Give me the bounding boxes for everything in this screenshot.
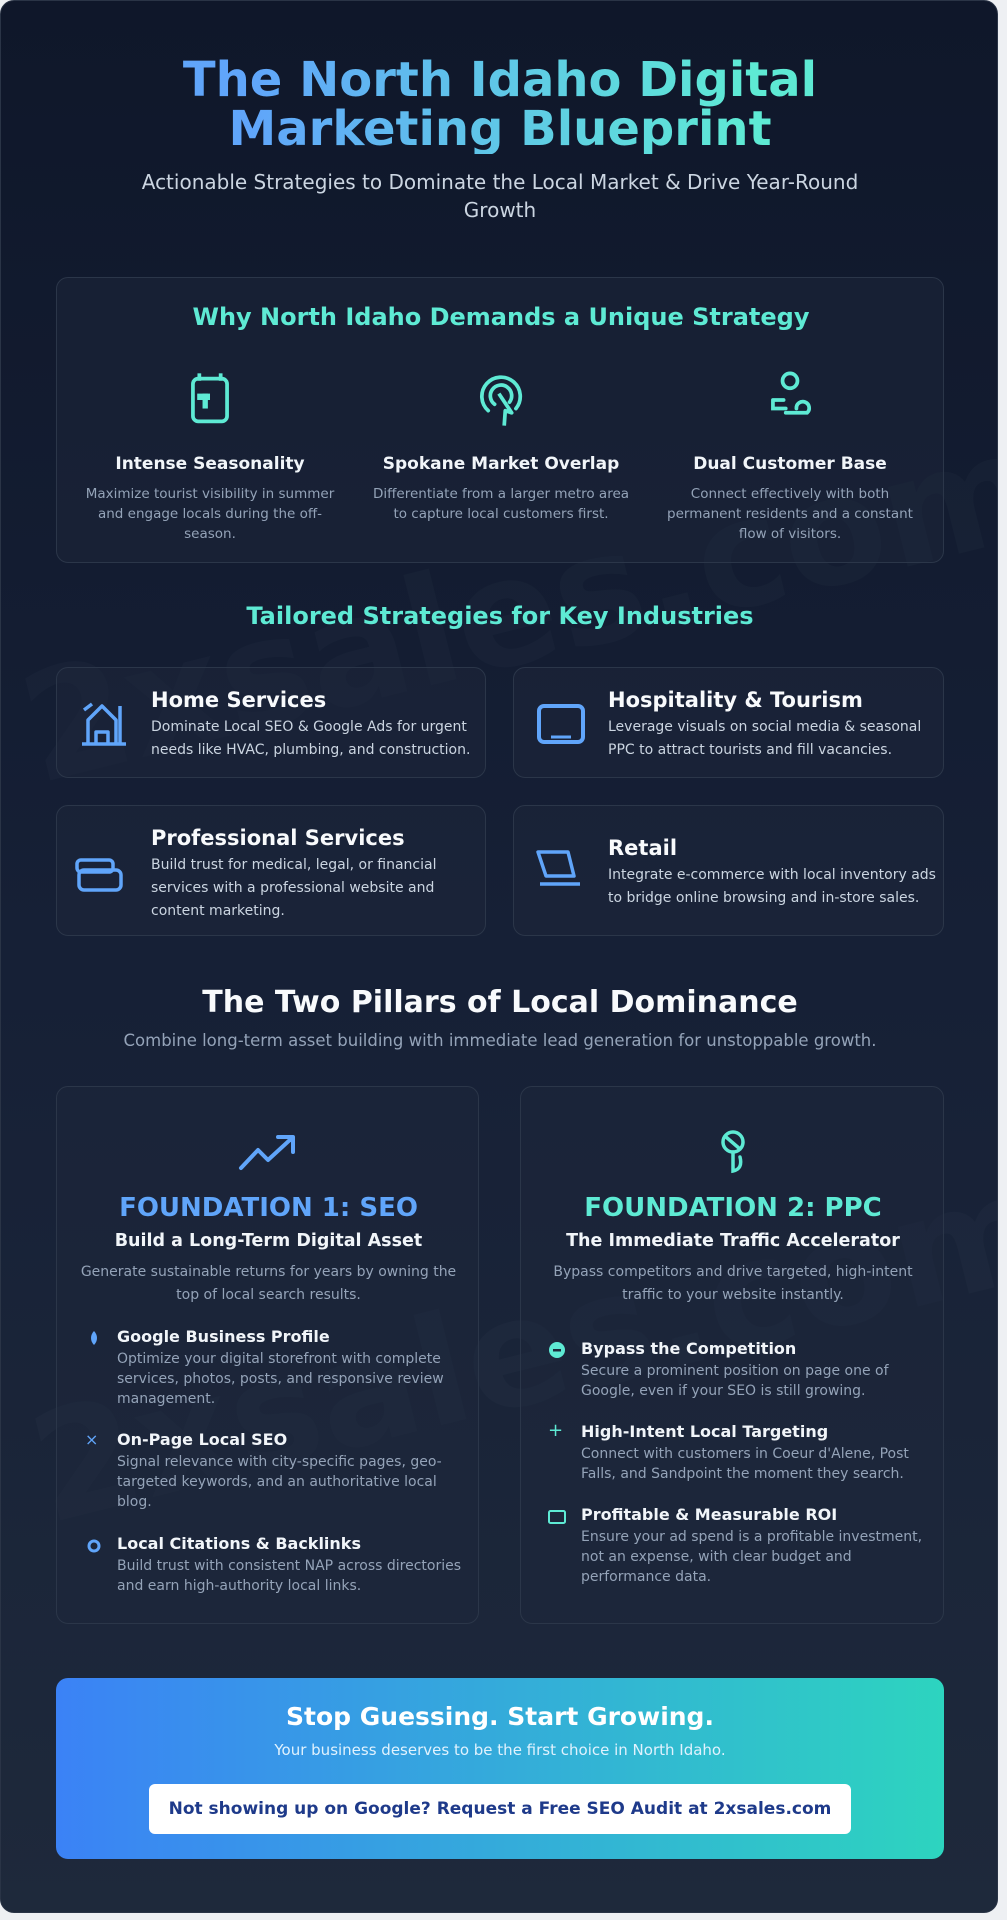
card: home services — [56, 667, 486, 778]
item: roi: Ensure your ad spend is a profitable investment, not an expense, with clear budget and performance data. — [581, 1529, 922, 1585]
item: gbp — [91, 1327, 444, 1407]
panel: why north idaho — [56, 277, 944, 563]
card: hospitality — [513, 667, 944, 778]
item: high intent: Connect with customers in Coeur d'Alene, Post Falls, and Sandpoint the moment they search. — [581, 1446, 909, 1482]
icon: cart/laptop — [536, 850, 580, 886]
item: roi: Profitable & Measurable ROI — [581, 1505, 837, 1524]
icon: laptop — [537, 704, 585, 744]
heading: foundation 1: FOUNDATION 1: SEO — [119, 1193, 418, 1223]
cta button — [149, 1784, 851, 1834]
card: home services: needs like HVAC, plumbing, and construction. — [151, 742, 470, 758]
item: bypass — [549, 1339, 889, 1399]
card: hospitality: Hospitality & Tourism — [608, 688, 863, 712]
item: spokane: Differentiate from a larger metro area — [373, 486, 629, 502]
item: citations — [88, 1534, 461, 1594]
heading: foundation 2: FOUNDATION 2: PPC — [584, 1193, 882, 1223]
card: professional: services with a professional website and — [151, 880, 434, 896]
item: high intent: High-Intent Local Targeting — [581, 1422, 828, 1441]
card: retail: Retail — [608, 836, 677, 860]
title: home services: Home Services — [151, 688, 326, 712]
icon: ppc — [721, 1130, 745, 1174]
title — [1, 56, 999, 154]
item: roi — [548, 1505, 922, 1585]
item: citations: Build trust with consistent NAP across directories and earn high-authority local links. — [117, 1558, 461, 1594]
panel: SEO: Generate sustainable returns for years by owning the top of local search results. — [81, 1264, 456, 1303]
item: gbp: Optimize your digital storefront with complete services, photos, posts, and responsive review management. — [117, 1351, 444, 1407]
heading: industries: Tailored Strategies for Key Industries — [246, 602, 754, 630]
panel: PPC: + — [548, 1420, 563, 1441]
cta subtitle: Your business deserves to be the first choice in North Idaho. — [274, 1741, 726, 1759]
card: professional — [56, 805, 486, 936]
subtitle: Actionable Strategies to Dominate the Local Market & Drive Year-Round Growth — [142, 170, 858, 222]
icon: house — [82, 702, 126, 746]
item: high intent — [548, 1420, 909, 1482]
item: spokane — [373, 375, 629, 522]
card: retail: Integrate e-commerce with local inventory ads — [608, 867, 936, 883]
cta title: Stop Guessing. Start Growing. — [286, 1702, 714, 1731]
item: citations: Local Citations & Backlinks — [117, 1534, 361, 1553]
item: onpage — [85, 1430, 442, 1510]
item: dual customer: Dual Customer Base — [693, 454, 887, 474]
panel: SEO — [56, 1086, 479, 1624]
icon: people — [771, 372, 812, 415]
icon: target cursor — [480, 375, 522, 426]
title: Marketing Blueprint — [228, 101, 772, 157]
item: dual customer: Connect effectively with both permanent residents and a constant flow of visitors. — [667, 486, 913, 542]
panel: PPC — [520, 1086, 944, 1624]
item: spokane: to capture local customers first. — [393, 506, 609, 522]
list: ppc items — [548, 1339, 922, 1585]
card: home services: Dominate Local SEO & Google Ads for urgent — [151, 719, 467, 735]
item: spokane: Spokane Market Overlap — [383, 454, 619, 474]
cta button: Not showing up on Google? Request a Free SEO Audit at 2xsales.com — [169, 1799, 831, 1819]
item: seasonality — [86, 373, 334, 542]
panel: PPC: Bypass competitors and drive targeted, high-intent traffic to your website instantly. — [553, 1264, 913, 1303]
title: The North Idaho Digital — [183, 52, 817, 108]
item: bypass: Secure a prominent position on page one of Google, even if your SEO is still growing. — [581, 1363, 889, 1399]
item: onpage: On-Page Local SEO — [117, 1430, 287, 1449]
card: retail: to bridge online browsing and in-store sales. — [608, 890, 919, 906]
card: professional: Build trust for medical, legal, or financial — [151, 857, 436, 873]
icon: calendar — [191, 373, 229, 424]
CTA banner — [56, 1678, 944, 1859]
card: hospitality: PPC to attract tourists and fill vacancies. — [608, 742, 892, 758]
panel: PPC: The Immediate Traffic Accelerator — [566, 1231, 900, 1251]
card: retail — [513, 805, 944, 936]
icon: trend — [238, 1135, 295, 1170]
list: seo items — [85, 1327, 461, 1594]
item: seasonality: Maximize tourist visibility in summer and engage locals during the off-season. — [86, 486, 334, 542]
panel: SEO: Build a Long-Term Digital Asset — [115, 1231, 422, 1251]
panel: SEO: × — [85, 1430, 98, 1449]
card: professional: Professional Services — [151, 826, 405, 850]
item: bypass: Bypass the Competition — [581, 1339, 796, 1358]
subheading: pillars: Combine long-term asset building with immediate lead generation for unstoppable growth. — [124, 1031, 876, 1050]
item: onpage: Signal relevance with city-specific pages, geo-targeted keywords, and an authoritative local blog. — [117, 1454, 442, 1510]
card: professional: content marketing. — [151, 903, 285, 919]
item: dual customer — [667, 372, 913, 542]
card: hospitality: Leverage visuals on social media & seasonal — [608, 719, 921, 735]
heading: two pillars: The Two Pillars of Local Dominance — [202, 985, 798, 1020]
heading: why: Why North Idaho Demands a Unique Strategy — [192, 303, 810, 331]
item: seasonality: Intense Seasonality — [115, 454, 305, 474]
item: gbp: Google Business Profile — [117, 1327, 330, 1346]
icon: cards — [75, 858, 123, 892]
